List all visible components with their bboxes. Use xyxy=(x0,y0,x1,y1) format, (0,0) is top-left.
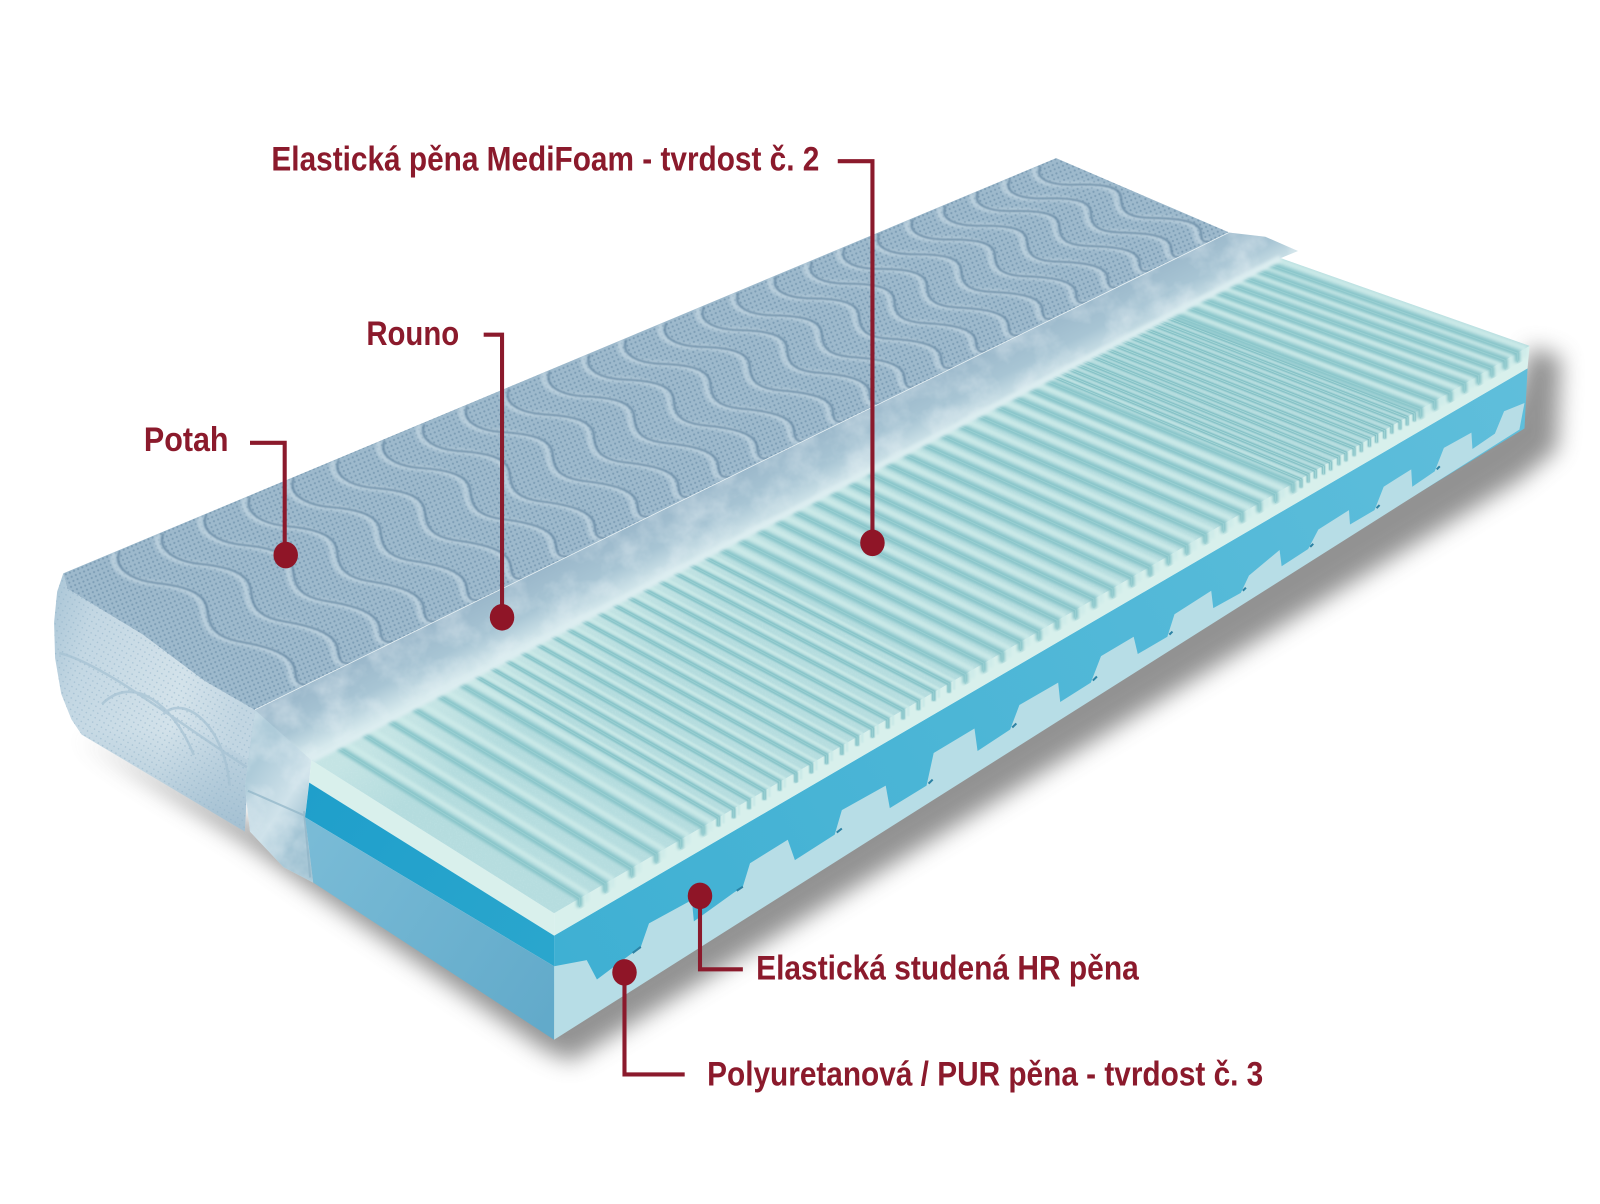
callout: Elastická studená HR pěna xyxy=(688,883,1139,988)
leader line: HR foam xyxy=(700,896,743,969)
marker: PUR foam xyxy=(612,959,637,986)
label: Potah: Potah xyxy=(144,421,229,459)
mattress illustration xyxy=(54,158,1561,1061)
end face of foam layers xyxy=(305,760,554,1040)
callout: Elastická pěna MediFoam xyxy=(271,140,885,556)
callout: Potah xyxy=(144,421,298,568)
marker: Potah xyxy=(273,542,298,568)
long side: blue HR foam layer xyxy=(554,368,1528,1020)
long side: top foam layer edge xyxy=(554,346,1530,936)
long side: lower PUR foam teeth xyxy=(554,403,1524,1040)
cover side face xyxy=(54,573,255,832)
marker: HR foam xyxy=(688,883,712,909)
label: PUR foam: Polyuretanová / PUR pěna - tvrdost č. 3 xyxy=(707,1056,1263,1094)
drop shadow xyxy=(80,347,1561,1061)
leader line: MediFoam xyxy=(838,161,872,543)
marker: MediFoam xyxy=(860,530,885,556)
label: Rouno: Rouno xyxy=(366,315,459,353)
label: HR foam: Elastická studená HR pěna xyxy=(756,950,1139,988)
leader line: PUR foam xyxy=(624,972,685,1074)
quilted cover top xyxy=(63,158,1230,710)
label: MediFoam foam: Elastická pěna MediFoam - tvrdost č. 2 xyxy=(271,140,819,178)
fleece layer xyxy=(245,233,1298,883)
mattress cross-section infographic xyxy=(54,144,1576,1092)
callout: Polyuretanová / PUR pěna xyxy=(612,959,1263,1094)
callout: Rouno xyxy=(366,315,514,631)
ribbed top of MediFoam layer xyxy=(311,258,1530,913)
marker: Rouno xyxy=(490,604,514,631)
leader line: Rouno xyxy=(484,335,502,617)
leader line: Potah xyxy=(250,443,285,555)
